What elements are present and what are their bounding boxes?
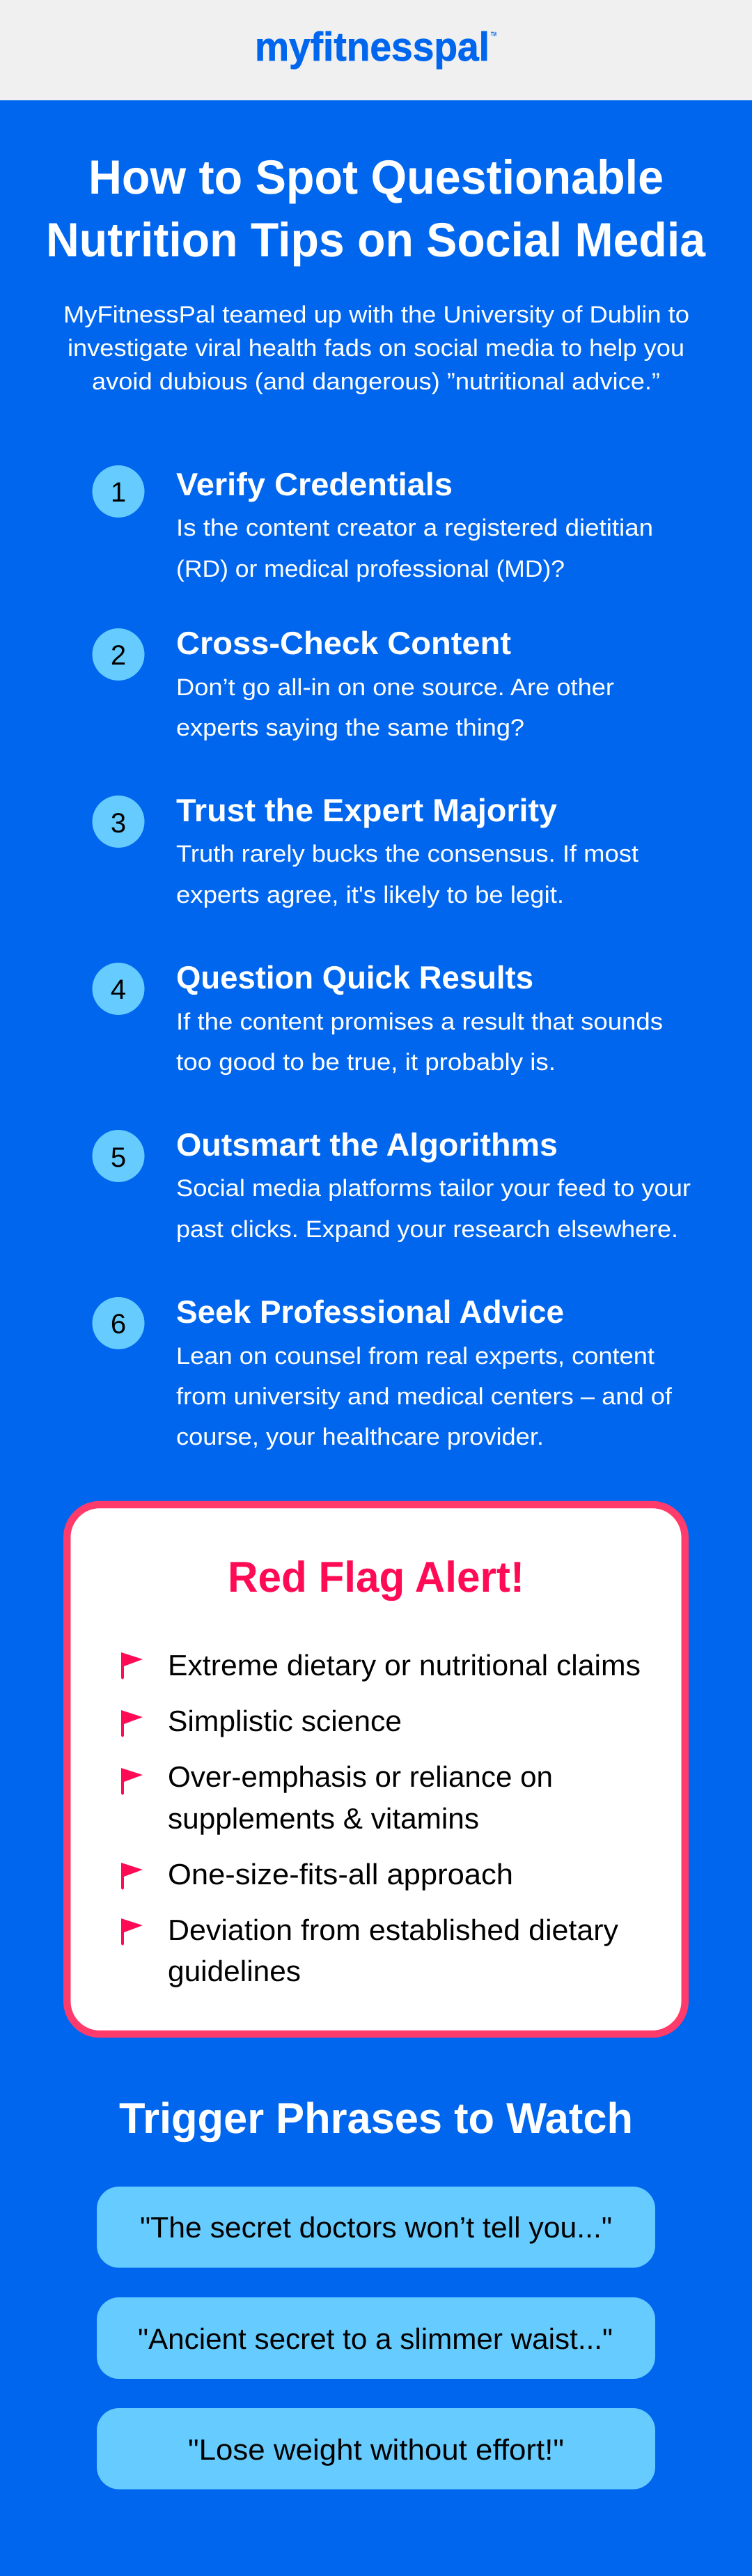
phrase pill 3: "Lose weight without effort!" bbox=[188, 2433, 564, 2466]
header bar with logo bbox=[0, 0, 752, 100]
step 4 body bbox=[176, 1009, 663, 1076]
step 1 body: Is the content creator a registered dietitian bbox=[176, 515, 653, 541]
step 6 heading: Seek Professional Advice bbox=[176, 1294, 564, 1330]
step 3 heading: Trust the Expert Majority bbox=[176, 792, 557, 828]
red flag item 3: supplements & vitamins bbox=[168, 1802, 479, 1835]
trigger phrases heading: Trigger Phrases to Watch bbox=[119, 2095, 633, 2143]
panel: red flag alert bbox=[67, 1505, 685, 2034]
step 4: question quick results bbox=[92, 959, 663, 1076]
step 6 body: from university and medical centers – and of bbox=[176, 1383, 673, 1410]
number badge 4: 4 bbox=[111, 975, 126, 1005]
main title: Nutrition Tips on Social Media bbox=[46, 213, 706, 267]
step 4 body: If the content promises a result that sounds bbox=[176, 1009, 663, 1035]
step 2 body bbox=[176, 674, 614, 741]
number badge 2 bbox=[92, 628, 145, 681]
step 5 body bbox=[176, 1175, 691, 1243]
step 4 body: too good to be true, it probably is. bbox=[176, 1049, 556, 1076]
step 4 heading: Question Quick Results bbox=[176, 959, 533, 995]
red flag heading: Red Flag Alert! bbox=[228, 1553, 524, 1601]
red flag item 5: Deviation from established dietary bbox=[168, 1914, 618, 1946]
step 1 body: (RD) or medical professional (MD)? bbox=[176, 556, 565, 582]
step 6: seek professional advice bbox=[92, 1294, 673, 1450]
number badge 1: 1 bbox=[111, 477, 126, 508]
step 5: outsmart the algorithms bbox=[92, 1126, 691, 1243]
intro paragraph: avoid dubious (and dangerous) ”nutritional advice.” bbox=[92, 368, 660, 395]
number badge 5: 5 bbox=[111, 1142, 126, 1173]
trademark mark: TM bbox=[491, 31, 496, 38]
phrase pill 3 bbox=[97, 2408, 655, 2490]
step 2: cross-check content bbox=[92, 625, 614, 741]
red flag item 3: Over-emphasis or reliance on bbox=[168, 1760, 553, 1793]
intro paragraph bbox=[63, 302, 689, 395]
number badge 4 bbox=[92, 963, 145, 1015]
number badge 6: 6 bbox=[111, 1309, 126, 1340]
red flag item 1: Extreme dietary or nutritional claims bbox=[168, 1649, 641, 1682]
step 3: trust the expert majority bbox=[92, 792, 639, 908]
intro paragraph: MyFitnessPal teamed up with the University of Dublin to bbox=[63, 302, 689, 328]
intro paragraph: investigate viral health fads on social media to help you bbox=[68, 335, 684, 362]
step 3 body: Truth rarely bucks the consensus. If most bbox=[176, 841, 639, 867]
step 6 body: course, your healthcare provider. bbox=[176, 1424, 544, 1450]
main title bbox=[46, 150, 706, 267]
step 2 body: Don’t go all-in on one source. Are other bbox=[176, 674, 614, 701]
step 5 body: past clicks. Expand your research elsewhere. bbox=[176, 1216, 678, 1243]
phrase pill 1 bbox=[97, 2187, 655, 2268]
step 5 body: Social media platforms tailor your feed to your bbox=[176, 1175, 691, 1202]
step 3 body bbox=[176, 841, 639, 908]
red flag item 5: guidelines bbox=[168, 1955, 301, 1987]
step 6 body bbox=[176, 1343, 673, 1450]
phrase pill 2 bbox=[97, 2297, 655, 2379]
step 3 body: experts agree, it's likely to be legit. bbox=[176, 882, 564, 908]
number badge 5 bbox=[92, 1130, 145, 1182]
number badge 6 bbox=[92, 1297, 145, 1349]
red flag item 4: One-size-fits-all approach bbox=[168, 1858, 513, 1891]
phrase pill 2: "Ancient secret to a slimmer waist..." bbox=[138, 2322, 613, 2355]
number badge 3: 3 bbox=[111, 808, 126, 839]
number badge 1 bbox=[92, 465, 145, 518]
step 1: verify credentials bbox=[92, 465, 653, 582]
step 2 heading: Cross-Check Content bbox=[176, 625, 511, 661]
step 6 body: Lean on counsel from real experts, content bbox=[176, 1343, 655, 1370]
step 2 body: experts saying the same thing? bbox=[176, 715, 524, 741]
main title: How to Spot Questionable bbox=[88, 150, 664, 204]
red flag item 3 bbox=[121, 1760, 553, 1835]
phrase pill 1: "The secret doctors won’t tell you..." bbox=[140, 2211, 612, 2244]
logo wordmark: myfitnesspal bbox=[255, 24, 489, 70]
red flag item 2: Simplistic science bbox=[168, 1705, 402, 1737]
step 1 body bbox=[176, 515, 653, 582]
red flag item 5 bbox=[121, 1914, 618, 1987]
number badge 3 bbox=[92, 796, 145, 848]
step 5 heading: Outsmart the Algorithms bbox=[176, 1126, 558, 1163]
step 1 heading: Verify Credentials bbox=[176, 466, 453, 502]
number badge 2: 2 bbox=[111, 640, 126, 671]
